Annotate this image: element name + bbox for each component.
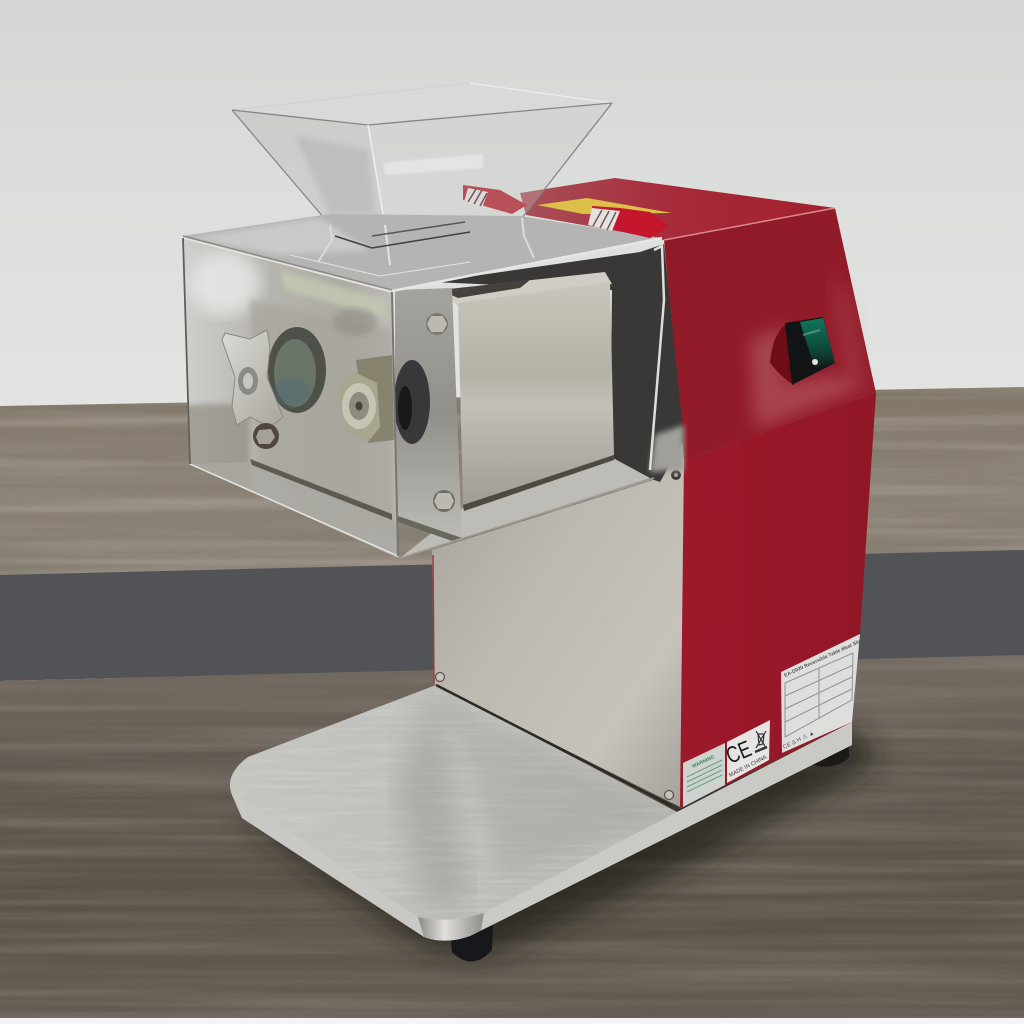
red rim highlight — [664, 208, 835, 240]
panel screws — [436, 470, 681, 800]
top reflection — [190, 218, 370, 255]
star knob — [222, 327, 326, 427]
bolt below knob — [253, 423, 279, 449]
steel blade housing — [440, 272, 614, 511]
table front wood surface — [0, 650, 1024, 1020]
mounting plate with bolts — [395, 288, 462, 540]
red upper right face — [664, 208, 876, 460]
red lower right face — [680, 393, 876, 808]
reflections on red face — [750, 270, 868, 428]
rubber feet — [450, 728, 849, 962]
stainless steel front panel — [432, 430, 686, 808]
icon: crossed-out bin — [755, 731, 767, 752]
guard edges — [183, 236, 664, 558]
table seen through guard — [189, 401, 252, 464]
table top wood surface — [0, 380, 1024, 580]
CE certification label: CE — [722, 736, 755, 769]
rocker switch — [770, 317, 835, 385]
lower clear pane — [190, 462, 398, 558]
specification label — [781, 634, 867, 753]
transparent hopper — [232, 83, 612, 228]
specification label: CE ∆ H ⚠ ▲ — [782, 729, 816, 751]
warning label: WARNING — [691, 754, 716, 770]
chrome sliver at machine edge — [650, 425, 684, 472]
bracket front edge — [398, 516, 462, 542]
transparent guard left side — [183, 236, 398, 558]
hex nut and pulley — [337, 355, 430, 444]
dark shadow blob — [333, 308, 377, 336]
bottom white strip — [0, 1018, 1024, 1024]
specification label: EA-D020 Reversible Table Meat Slicer — [783, 636, 867, 679]
inner steel shaft plate — [250, 300, 395, 540]
warning label — [683, 743, 725, 807]
CE certification label — [722, 720, 770, 783]
machine shadow on table — [238, 725, 880, 955]
hopper neck — [290, 218, 534, 276]
red top face — [520, 178, 835, 240]
CE certification label: MADE IN CHINA — [728, 754, 768, 779]
background wall — [0, 0, 1024, 410]
details seen through guard — [183, 251, 398, 558]
lower bracket edge — [250, 459, 392, 520]
panel left red edge — [433, 555, 434, 684]
machine — [182, 83, 876, 962]
yellow warning sticker — [537, 198, 672, 214]
bright reflection — [189, 251, 261, 315]
base plate — [220, 680, 860, 950]
view through guard to steel panel — [400, 458, 650, 558]
table edge dark stripe — [0, 550, 1024, 681]
green reflection band — [280, 270, 385, 318]
safety latches — [463, 185, 669, 238]
clear top of guard — [182, 214, 662, 290]
guard interior dark gap — [432, 244, 684, 482]
panel bottom seam — [436, 685, 672, 806]
